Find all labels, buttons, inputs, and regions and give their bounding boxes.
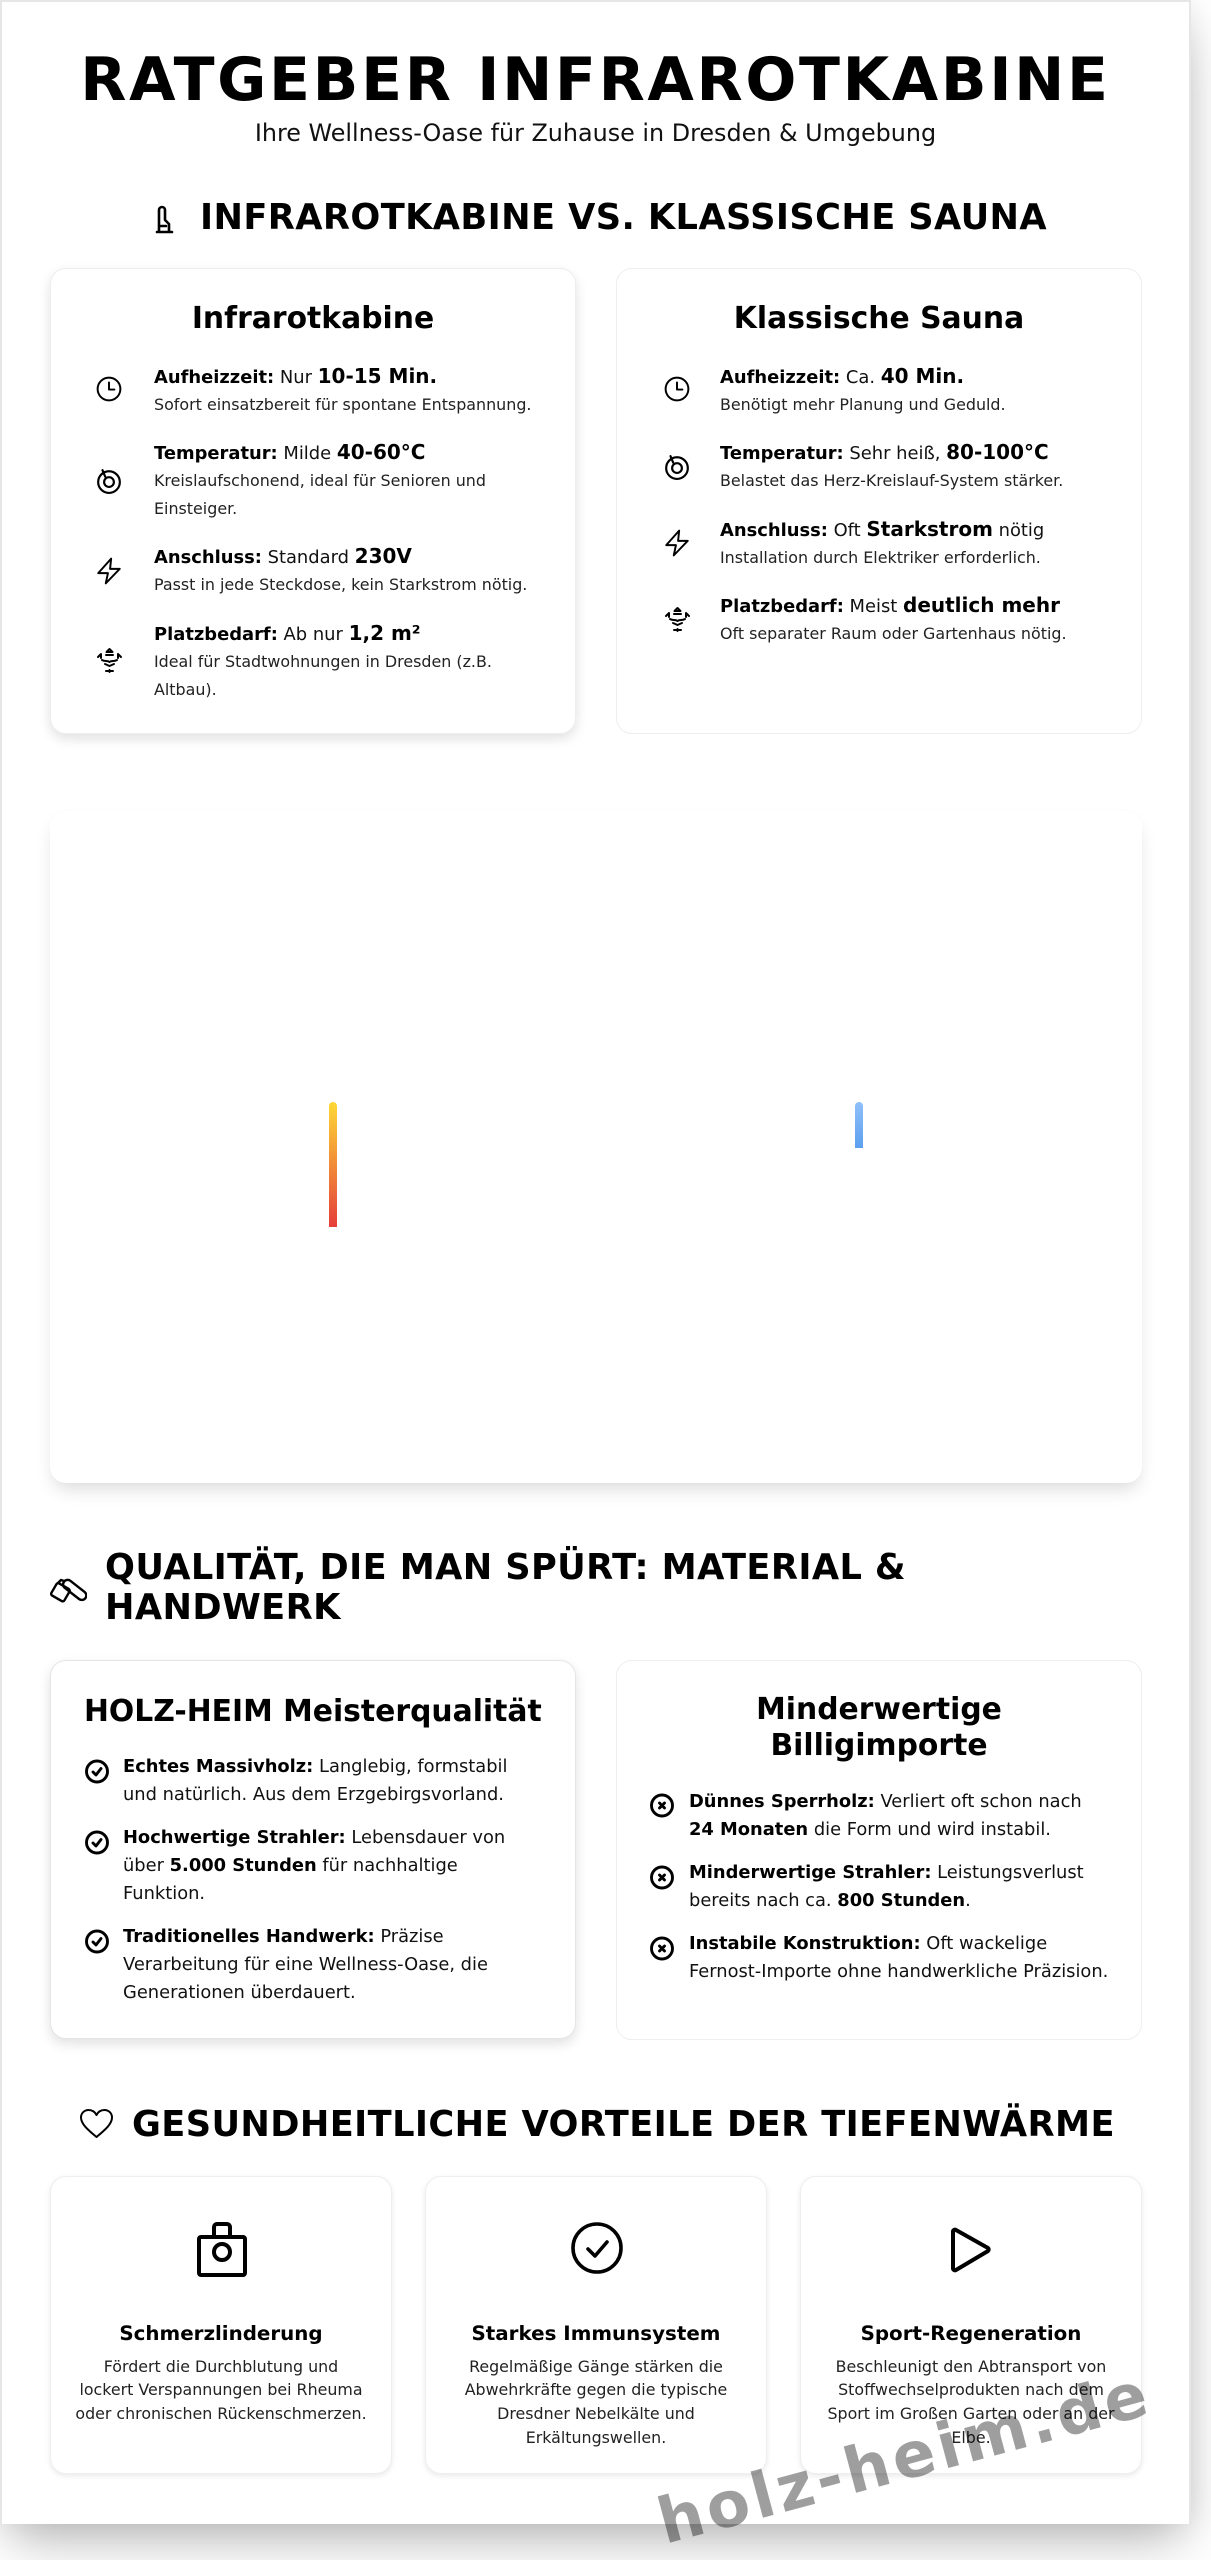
- item: Handwerk: [123, 1926, 488, 2003]
- row: Platzbedarf: [154, 621, 492, 699]
- row: Anschluss: Anschluss: Oft Starkstrom nötig: [720, 517, 1044, 541]
- heading: Qualität: HANDWERK: [105, 1587, 341, 1628]
- panel: Minderwertige Billigimporte: [616, 1660, 1142, 2040]
- icon: check: [85, 1930, 109, 1954]
- item: Handwerk: Generationen überdauert.: [123, 1982, 356, 2003]
- row: Temperatur: [154, 440, 486, 518]
- card text: [75, 2356, 367, 2423]
- panel: Sport-Regeneration: [800, 2176, 1142, 2474]
- icon: cross: [650, 1936, 674, 1960]
- card text: Regelmäßige Gänge stärken die: [469, 2356, 723, 2376]
- row: Temperatur: Einsteiger.: [154, 499, 237, 518]
- panel heading: Minderwertige: [756, 1692, 1002, 1727]
- icon: check circle: [571, 2222, 623, 2274]
- card title: Sport-Regeneration: [861, 2322, 1081, 2345]
- item: Handwerk: Verarbeitung für eine Wellness-Oase, die: [123, 1954, 488, 1975]
- icon: check: [85, 1760, 109, 1784]
- icon: sauna section: [156, 206, 174, 234]
- icon: clock: [96, 376, 122, 402]
- row: Platzbedarf: Oft separater Raum oder Gartenhaus nötig.: [720, 624, 1066, 643]
- card title: Starkes Immunsystem: [472, 2322, 720, 2345]
- item: Massivholz: Echtes Massivholz: Langlebig, formstabil: [123, 1756, 507, 1777]
- icon: temperature: [665, 455, 689, 480]
- row: Aufheizzeit: Aufheizzeit: Nur 10-15 Min.: [154, 364, 437, 388]
- icon: material: [50, 1578, 87, 1602]
- item: Strahler: bereits nach ca. 800 Stunden.: [689, 1890, 971, 1911]
- item: Strahler: Minderwertige Strahler: Leistungsverlust: [689, 1862, 1084, 1883]
- row: Temperatur: [720, 440, 1063, 490]
- item: Sperrholz: Dünnes Sperrholz: Verliert oft schon nach: [689, 1791, 1082, 1812]
- row: Temperatur: Belastet das Herz-Kreislauf-System stärker.: [720, 471, 1063, 490]
- item: Handwerk: Traditionelles Handwerk: Präzise: [123, 1926, 444, 1947]
- heading: Qualität: [105, 1546, 906, 1628]
- item: Massivholz: und natürlich. Aus dem Erzgebirgsvorland.: [123, 1784, 504, 1805]
- panel: Klassische Sauna: [616, 268, 1142, 734]
- row: Aufheizzeit: Aufheizzeit: Ca. 40 Min.: [720, 364, 964, 388]
- card text: Abwehrkräfte gegen die typische: [465, 2380, 727, 2399]
- icon: space: [97, 648, 122, 673]
- item: Konstruktion: Fernost-Importe ohne handwerkliche Präzision.: [689, 1961, 1108, 1982]
- row: Platzbedarf: Ideal für Stadtwohnungen in Dresden (z.B.: [154, 652, 492, 671]
- panel heading: HOLZ-HEIM Meisterqualität: [84, 1694, 542, 1729]
- watermark: holz-heim.de: [650, 2357, 1159, 2558]
- icon: cross: [650, 1794, 674, 1818]
- icon: heart: [80, 2109, 113, 2138]
- panel heading: Infrarotkabine: [192, 301, 434, 336]
- row: Aufheizzeit: [720, 364, 1006, 414]
- bar: klassische Sauna: [855, 1102, 863, 1148]
- icon: temperature: [97, 469, 121, 494]
- row: Anschluss: Anschluss: Standard 230V: [154, 544, 412, 568]
- row: Aufheizzeit: Sofort einsatzbereit für spontane Entspannung.: [154, 395, 531, 414]
- item: Strahler: Hochwertige Strahler: Lebensdauer von: [123, 1827, 505, 1848]
- card text: [464, 2356, 727, 2447]
- icon: lightning: [665, 530, 689, 556]
- panel: temperature chart card: [50, 811, 1142, 1483]
- row: Platzbedarf: Platzbedarf: Ab nur 1,2 m²: [154, 621, 421, 645]
- icon: play: [950, 2228, 991, 2272]
- panel heading: [756, 1692, 1002, 1763]
- row: Temperatur: Temperatur: Milde 40-60°C: [154, 440, 426, 464]
- card text: Elbe.: [951, 2428, 991, 2447]
- row: Platzbedarf: Altbau).: [154, 680, 217, 699]
- bar: Infrarotkabine: [329, 1102, 337, 1227]
- icon: check: [85, 1830, 109, 1854]
- item: Sperrholz: 24 Monaten die Form und wird instabil.: [689, 1819, 1051, 1840]
- card text: Stoffwechselprodukten nach dem: [838, 2380, 1104, 2399]
- icon: space: [665, 607, 690, 632]
- row: Anschluss: Passt in jede Steckdose, kein Starkstrom nötig.: [154, 575, 527, 594]
- heading: Infrarotkabine vs. klassische Sauna: INFRAROTKABINE VS. KLASSISCHE SAUNA: [200, 197, 1047, 238]
- card text: lockert Verspannungen bei Rheuma: [79, 2380, 363, 2399]
- panel heading: Klassische Sauna: [734, 301, 1024, 336]
- card text: oder chronischen Rückenschmerzen.: [75, 2404, 367, 2423]
- panel heading: Billigimporte: [770, 1728, 988, 1763]
- row: Anschluss: [720, 517, 1044, 567]
- card title: Schmerzlinderung: [119, 2322, 323, 2345]
- item: Strahler: [689, 1862, 1084, 1911]
- icon: lightning: [97, 558, 121, 584]
- item: Strahler: Funktion.: [123, 1883, 205, 1904]
- card text: Sport im Großen Garten oder an der: [827, 2404, 1115, 2423]
- heading: Gesundheitliche Vorteile: GESUNDHEITLICHE VORTEILE DER TIEFENWÄRME: [132, 2104, 1115, 2145]
- row: Anschluss: [154, 544, 527, 594]
- panel: Schmerzlinderung: [50, 2176, 392, 2474]
- icon: cross: [650, 1866, 674, 1890]
- card text: Fördert die Durchblutung und: [104, 2356, 338, 2376]
- row: Platzbedarf: [720, 593, 1066, 643]
- row: Temperatur: Kreislaufschonend, ideal für Senioren und: [154, 471, 486, 490]
- row: Temperatur: Temperatur: Sehr heiß, 80-100°C: [720, 440, 1049, 464]
- panel: Immunsystem: [425, 2176, 767, 2474]
- item: Konstruktion: Instabile Konstruktion: Oft wackelige: [689, 1933, 1047, 1954]
- row: Aufheizzeit: Benötigt mehr Planung und Geduld.: [720, 395, 1006, 414]
- row: Platzbedarf: Platzbedarf: Meist deutlich mehr: [720, 593, 1060, 617]
- row: Anschluss: Installation durch Elektriker erforderlich.: [720, 548, 1041, 567]
- subtitle: Ihre Wellness-Oase für Zuhause in Dresden & Umgebung: [255, 119, 936, 147]
- row: Aufheizzeit: [154, 364, 531, 414]
- icon: bag: [197, 2222, 247, 2277]
- card text: [827, 2356, 1115, 2447]
- card text: Erkältungswellen.: [526, 2428, 666, 2447]
- title: RATGEBER INFRAROTKABINE: [80, 45, 1111, 115]
- item: Konstruktion: [689, 1933, 1108, 1982]
- icon: clock: [664, 376, 690, 402]
- item: Strahler: über 5.000 Stunden für nachhaltige: [123, 1855, 458, 1876]
- panel: HOLZ-HEIM Meisterqualität: [50, 1660, 576, 2039]
- card text: Beschleunigt den Abtransport von: [836, 2356, 1106, 2376]
- panel: Infrarotkabine: [50, 268, 576, 734]
- item: Massivholz: [123, 1756, 507, 1805]
- heading: Qualität: QUALITÄT, DIE MAN SPÜRT: MATERIAL &: [105, 1547, 906, 1588]
- item: Strahler: [123, 1827, 505, 1904]
- item: Sperrholz: [689, 1791, 1082, 1840]
- card text: Dresdner Nebelkälte und: [497, 2404, 695, 2423]
